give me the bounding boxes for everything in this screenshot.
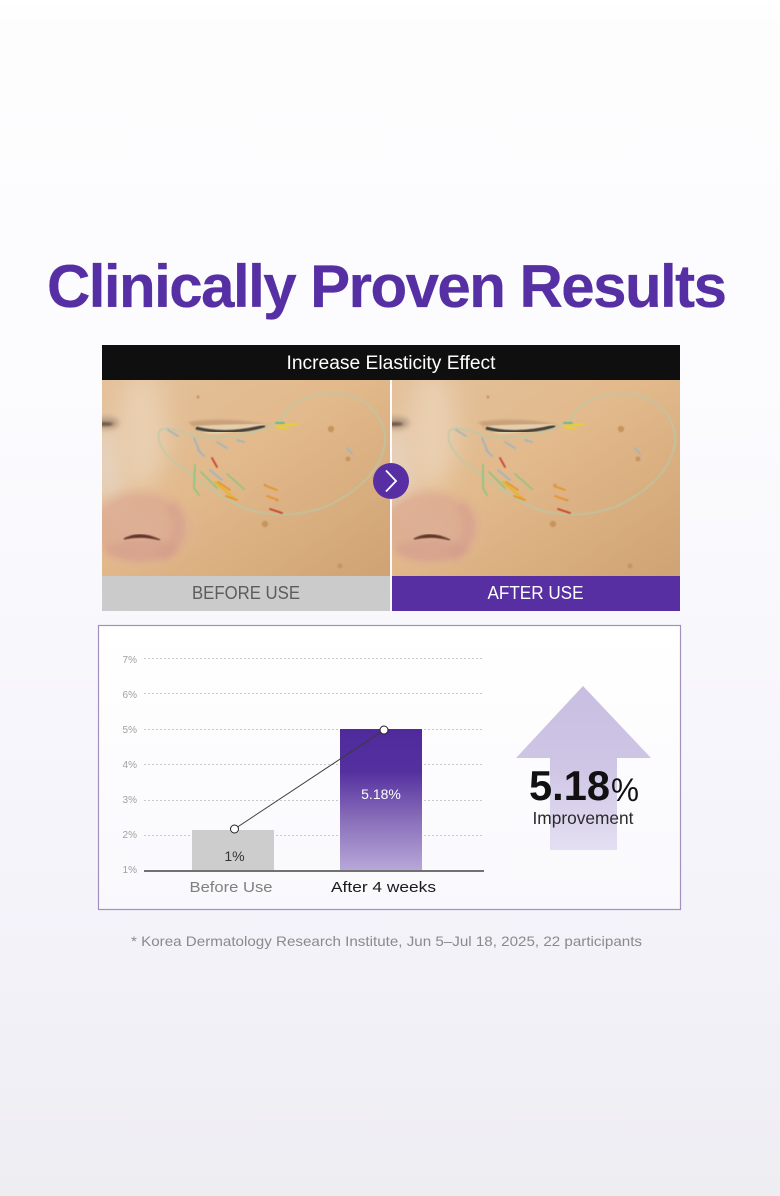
y axis labels: 4%	[123, 760, 137, 771]
panel: elasticity results	[98, 626, 680, 910]
after use label: AFTER USE	[488, 583, 584, 603]
trend line	[230, 726, 388, 833]
y axis labels: 6%	[123, 690, 137, 701]
before use label: BEFORE USE	[192, 583, 300, 603]
y axis labels: 5%	[123, 725, 137, 736]
bar: after 4 weeks: 5.18%	[361, 786, 401, 802]
improvement value: Improvement	[532, 808, 634, 828]
bar: before use	[192, 830, 274, 870]
y axis labels	[123, 655, 137, 876]
after use label	[392, 576, 680, 611]
comparison header bar	[102, 345, 680, 380]
icon: next arrow badge	[373, 463, 409, 499]
panel: before and after comparison	[80, 345, 680, 611]
photo: skin after use	[392, 380, 680, 576]
y axis labels: 7%	[123, 655, 137, 666]
comparison header bar: Increase Elasticity Effect	[286, 353, 496, 374]
x axis label: before use: Before Use	[190, 879, 272, 896]
before use label	[102, 576, 390, 611]
photo: skin before use	[102, 380, 390, 576]
improvement value: %	[611, 772, 639, 808]
improvement value: 5.18	[529, 762, 610, 809]
y axis labels: 3%	[123, 795, 137, 806]
y axis labels: 2%	[123, 830, 137, 841]
icon: improvement arrow	[516, 686, 651, 850]
bar: after 4 weeks	[340, 729, 422, 870]
title: Clinically Proven Results	[47, 253, 727, 320]
footnote: * Korea Dermatology Research Institute, Jun 5–Jul 18, 2025, 22 participants	[131, 933, 642, 949]
bar chart	[123, 655, 484, 896]
improvement value	[529, 762, 639, 828]
bar: before use: 1%	[224, 848, 245, 864]
x axis label: after 4 weeks: After 4 weeks	[331, 879, 436, 896]
y axis labels: 1%	[123, 865, 137, 876]
